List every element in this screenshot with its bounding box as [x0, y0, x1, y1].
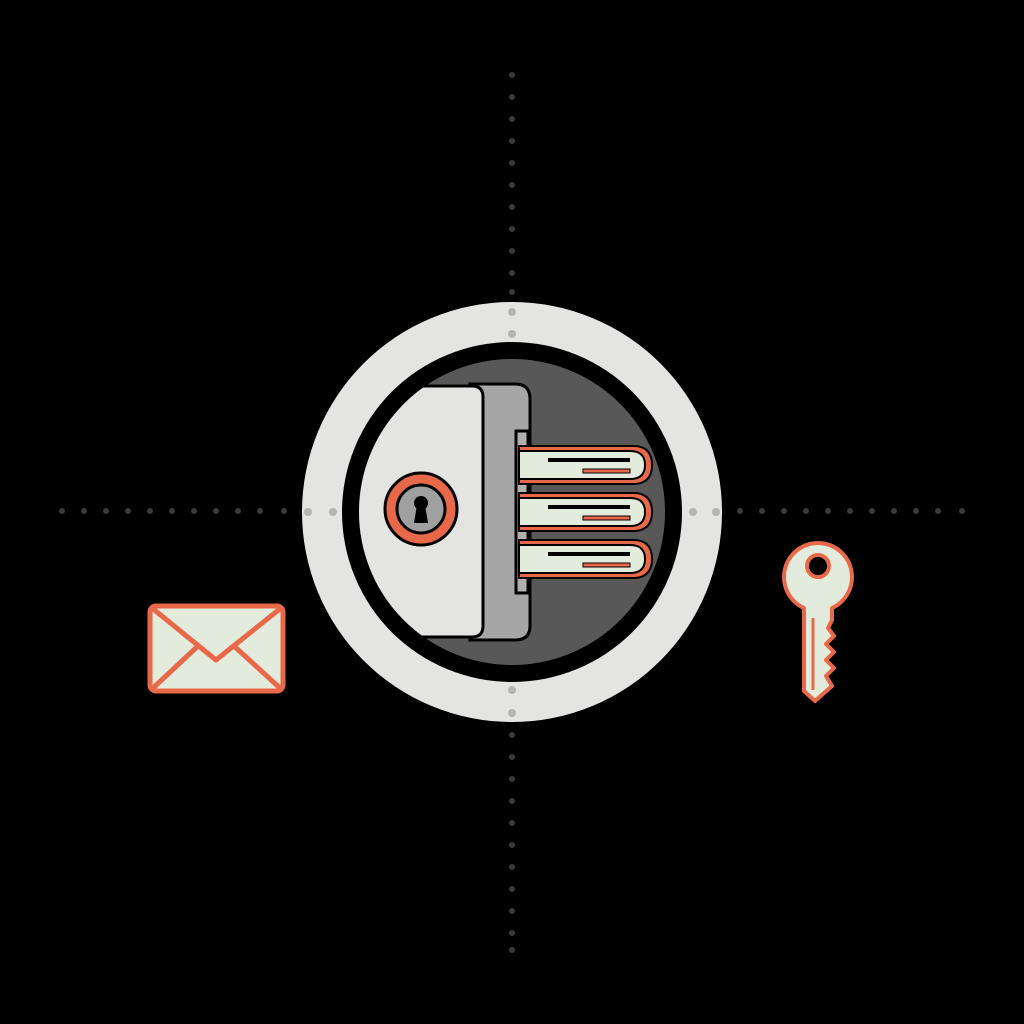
- icon: key: [784, 543, 852, 701]
- vault door front: [359, 384, 484, 638]
- ring dots: [304, 308, 720, 717]
- vault door side panel: [470, 384, 530, 640]
- door bracket: [516, 431, 528, 593]
- dotted guide lines: [59, 72, 965, 953]
- main illustration: [59, 72, 965, 953]
- vault emblem: [300, 302, 722, 722]
- icon: envelope: [150, 606, 283, 691]
- documents: [519, 446, 652, 578]
- keyhole: [385, 473, 457, 545]
